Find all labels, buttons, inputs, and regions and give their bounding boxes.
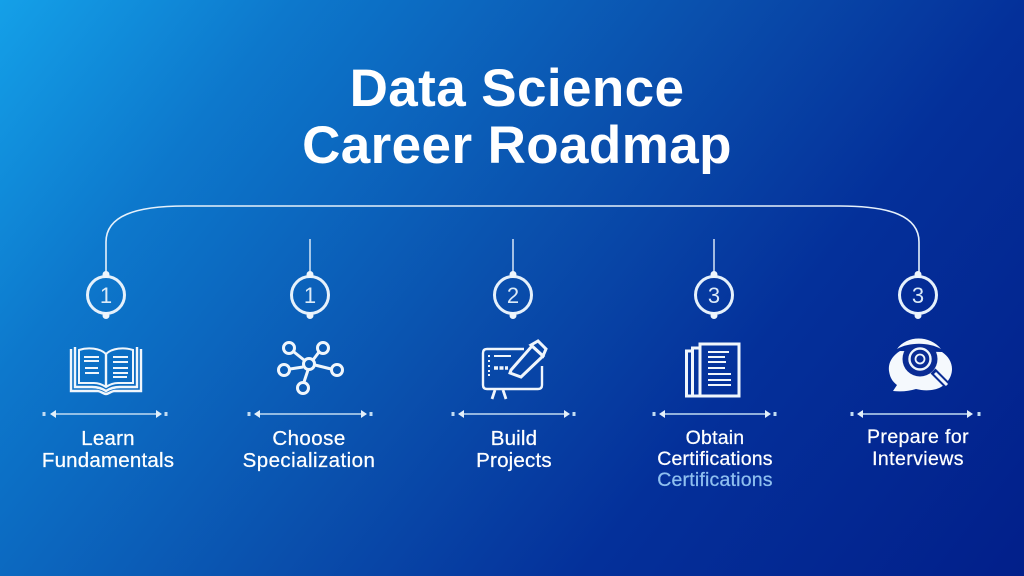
label: step 3: Build <box>491 427 537 450</box>
title: Data Science <box>350 59 684 118</box>
label: step 2: Specialization <box>243 449 375 472</box>
label: step 3 <box>476 427 552 472</box>
connector: bracket line <box>106 206 919 273</box>
icon: speech bubble with magnifier <box>889 338 952 391</box>
label: step 1 <box>42 427 174 472</box>
icon: presentation board with pencil <box>483 341 546 399</box>
divider arrow: step 2 <box>249 410 371 418</box>
label: step 4: Certifications <box>657 469 773 491</box>
label: step 5 <box>867 426 969 470</box>
divider arrow: step 5 <box>852 410 979 418</box>
label: step 3: Projects <box>476 449 552 472</box>
node: step 4 <box>696 271 732 319</box>
connector: step 4 line <box>713 239 715 273</box>
divider arrow: step 4 <box>654 410 775 418</box>
node: step 3 <box>494 271 532 319</box>
node: step 2 <box>292 271 328 319</box>
label: step 2: Choose <box>272 427 346 450</box>
title: Career Roadmap <box>302 116 732 175</box>
icon: network nodes <box>278 342 342 394</box>
icon: stacked documents <box>686 344 739 396</box>
label: step 2 <box>243 427 375 472</box>
label: step 5: Interviews <box>872 448 964 470</box>
label: step 4 <box>657 427 773 491</box>
node: step 4: 3 <box>708 283 720 308</box>
connector: step 2 line <box>309 239 311 273</box>
node: step 5: 3 <box>912 283 924 308</box>
node: step 2: 1 <box>304 283 316 308</box>
divider arrow: step 3 <box>453 410 574 418</box>
title <box>302 59 732 175</box>
label: step 4: Obtain <box>686 427 744 449</box>
node: step 1: 1 <box>100 283 112 308</box>
label: step 4: Certifications <box>657 448 773 470</box>
icon: open book <box>71 347 141 394</box>
label: step 1: Learn <box>81 427 135 450</box>
connector: step 3 line <box>512 239 514 273</box>
label: step 5: Prepare for <box>867 426 969 448</box>
node: step 5 <box>900 271 936 319</box>
node: step 1 <box>88 271 124 319</box>
node: step 3: 2 <box>507 283 519 308</box>
divider arrow: step 1 <box>44 410 166 418</box>
label: step 1: Fundamentals <box>42 449 174 472</box>
